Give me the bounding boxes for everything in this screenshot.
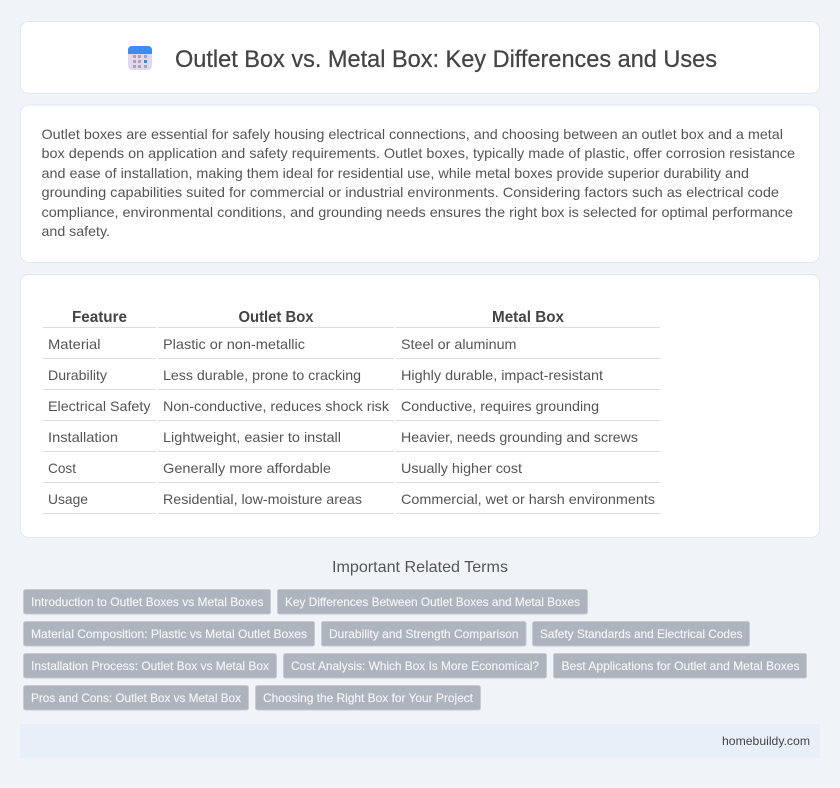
tag list: related terms	[24, 590, 806, 710]
table row: installation: Lightweight, easier to install	[163, 429, 341, 445]
table row: usage: Residential, low-moisture areas	[163, 491, 362, 507]
tag	[24, 654, 276, 678]
tag: Durability and Strength Comparison	[329, 627, 518, 641]
table row: material: Plastic or non-metallic	[163, 336, 305, 352]
table row: installation: Installation	[48, 429, 118, 445]
table row: material: Material	[48, 336, 100, 352]
tag	[284, 654, 546, 678]
text block: introduction paragraph	[42, 126, 795, 239]
tag: Safety Standards and Electrical Codes	[540, 627, 742, 641]
table row: durability: Durability	[48, 367, 107, 383]
tag	[554, 654, 806, 678]
table row: electrical safety: Electrical Safety	[48, 398, 150, 414]
icon: calendar-style outlet box	[128, 46, 152, 70]
table row: usage	[48, 491, 655, 507]
tag	[24, 590, 270, 614]
table header row: Outlet Box	[238, 309, 314, 326]
footer text: site name: homebuildy.com	[722, 734, 810, 748]
table row: electrical safety: Non-conductive, reduces shock risk	[163, 398, 390, 414]
panel: comparison table	[20, 274, 820, 538]
table row: durability	[48, 367, 603, 383]
tag	[322, 622, 526, 646]
table row: durability: Less durable, prone to cracking	[163, 367, 361, 383]
panel: header	[20, 22, 820, 94]
table header row: Feature	[72, 309, 127, 326]
tag: Choosing the Right Box for Your Project	[263, 691, 474, 705]
tag: Pros and Cons: Outlet Box vs Metal Box	[31, 691, 241, 705]
title: Outlet Box vs. Metal Box: Key Differences and Uses	[175, 46, 717, 73]
text block: introduction paragraph: and ease of installation, making them ideal for residential use, while metal boxes provide superior durability and	[42, 165, 749, 181]
text block: introduction paragraph: box depends on application and safety requirements. Outlet boxes, typically made of plastic, offer corrosion resistance	[42, 145, 795, 161]
tag	[24, 622, 314, 646]
table row: electrical safety	[48, 398, 599, 414]
tag: Best Applications for Outlet and Metal Boxes	[562, 659, 800, 673]
table header row	[72, 309, 564, 326]
panel: introduction	[20, 105, 820, 262]
table row: installation	[48, 429, 638, 445]
tag: Installation Process: Outlet Box vs Metal Box	[31, 659, 269, 673]
tag: Material Composition: Plastic vs Metal Outlet Boxes	[31, 627, 307, 641]
footer	[20, 724, 820, 758]
heading: important related terms: Important Related Terms	[332, 559, 508, 576]
text block: introduction paragraph: Outlet boxes are essential for safely housing electrical connections, and choosing between an outlet box and a metal	[42, 126, 783, 142]
table row: cost: Generally more affordable	[163, 460, 331, 476]
text block: introduction paragraph: compliance, environmental conditions, and grounding needs ensures the right box is selected for optimal performance	[42, 204, 793, 220]
table row: usage: Commercial, wet or harsh environments	[401, 491, 655, 507]
table row: cost: Usually higher cost	[401, 460, 522, 476]
tag: Cost Analysis: Which Box Is More Economical?	[291, 659, 539, 673]
table row: cost	[48, 460, 522, 476]
tag	[278, 590, 588, 614]
tag	[256, 686, 480, 710]
text block: introduction paragraph: grounding capabilities suited for commercial or industrial environments. Considering factors such as electrical code	[42, 184, 779, 200]
table row: material: Steel or aluminum	[401, 336, 516, 352]
tag: Introduction to Outlet Boxes vs Metal Boxes	[31, 595, 264, 609]
table row: usage: Usage	[48, 491, 88, 507]
table row: cost: Cost	[48, 460, 76, 476]
table row: electrical safety: Conductive, requires grounding	[401, 398, 599, 414]
tag	[532, 622, 750, 646]
table row: durability: Highly durable, impact-resistant	[401, 367, 603, 383]
tag: Key Differences Between Outlet Boxes and Metal Boxes	[285, 595, 580, 609]
text block: introduction paragraph: and safety.	[42, 223, 110, 239]
table header row: Metal Box	[492, 309, 564, 326]
table row: material	[48, 336, 516, 352]
tag	[24, 686, 248, 710]
table row: installation: Heavier, needs grounding and screws	[401, 429, 638, 445]
